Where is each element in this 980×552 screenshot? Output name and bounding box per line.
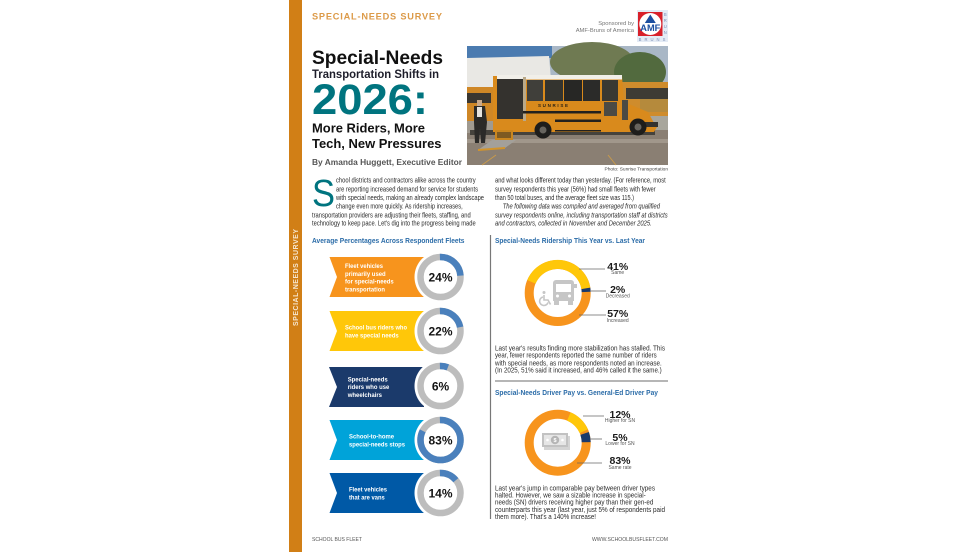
lift <box>495 130 513 140</box>
panel: stat vans: that are vans <box>349 494 385 502</box>
background buses <box>467 87 495 121</box>
icon: AMF-Bruns logo: U <box>650 37 654 42</box>
donut labels: ridership: Same <box>611 270 624 276</box>
donut labels: ridership <box>579 261 630 324</box>
icon: banknotes: $ <box>553 438 557 444</box>
photo: school bus with wheelchair lift: SUNRISE <box>538 103 568 108</box>
text: ridership commentary: (In 2025, 51% said it increased, and 46% called it the same.) <box>495 366 662 374</box>
panel: stat vans: 14% <box>428 486 453 500</box>
trees <box>550 42 634 82</box>
drop cap: S <box>312 173 335 215</box>
photo: school bus with wheelchair lift <box>467 42 668 165</box>
intro text: left column <box>312 175 484 228</box>
panel: stat vans <box>330 467 466 519</box>
icon: AMF-Bruns logo: U <box>664 24 667 29</box>
stripes and name <box>523 111 601 114</box>
intro text: left column: technology to keep pace. Let's dig into the progress being made <box>312 219 476 228</box>
sky <box>467 46 668 106</box>
sponsor credit: AMF-Bruns of America <box>576 28 635 34</box>
heading: driver pay: Special-Needs Driver Pay vs. General-Ed Driver Pay <box>495 388 659 397</box>
title: Transportation Shifts in <box>312 69 439 81</box>
panel: stat fleet vehicles for special needs: primarily used <box>345 271 386 278</box>
sponsor credit <box>576 21 635 34</box>
text: ridership commentary: with special needs, as more respondents noted an increase. <box>494 358 662 368</box>
text: driver pay commentary <box>495 483 665 521</box>
panel: stat school-to-home stops: special-needs stops <box>349 441 405 448</box>
bus body <box>493 76 657 132</box>
icon: AMF-Bruns logo <box>637 10 668 42</box>
text: driver pay commentary: Last year's jump in comparable pay between driver types <box>495 483 655 492</box>
text: driver pay commentary: halted. However, we saw a sizable increase in special- <box>495 490 646 499</box>
donut chart: ridership <box>520 256 595 330</box>
panel: stat school-to-home stops: School-to-home <box>349 434 394 440</box>
donut labels: driver pay <box>577 409 636 471</box>
person <box>477 100 482 106</box>
panel: stat wheelchair riders: 6% <box>432 380 450 394</box>
divider rule <box>495 380 668 382</box>
panel: stat school-to-home stops <box>330 414 466 466</box>
intro text: right column: The following data was compiled and averaged from qualified <box>503 201 661 210</box>
panel: stat wheelchair riders: riders who use <box>348 384 390 391</box>
title: Tech, New Pressures <box>312 136 442 151</box>
icon: AMF-Bruns logo: B <box>664 12 667 17</box>
panel: stat school bus riders: have special needs <box>345 332 399 340</box>
donut labels: driver pay: Lower for SN <box>605 441 635 447</box>
donut labels: driver pay: 12% <box>609 409 631 421</box>
donut labels: driver pay: 5% <box>612 432 628 444</box>
footer <box>312 537 668 543</box>
intro text: right column <box>495 175 668 228</box>
column divider <box>490 235 492 519</box>
intro text: right column: and what looks different today than yesterday. (For reference, most <box>495 175 666 184</box>
donut labels: ridership: Decreased <box>606 294 630 300</box>
icon: AMF-Bruns logo: R <box>664 18 667 23</box>
panel: stat fleet vehicles for special needs: for special-needs <box>345 279 394 286</box>
donut labels: ridership: 57% <box>607 308 629 320</box>
donut labels: driver pay: Higher for SN <box>605 418 636 424</box>
panel: stat vans: Fleet vehicles <box>349 487 387 494</box>
heading: average percentages: Average Percentages Across Respondent Fleets <box>312 236 464 245</box>
panel: stat wheelchair riders: wheelchairs <box>347 392 382 399</box>
donut labels: ridership: 2% <box>610 284 626 296</box>
panel: stat fleet vehicles for special needs: 24% <box>428 270 453 284</box>
title: Special-Needs <box>312 47 443 69</box>
panel: stat fleet vehicles for special needs: transportation <box>345 286 385 293</box>
footer: WWW.SCHOOLBUSFLEET.COM <box>592 537 668 543</box>
text: ridership commentary: Last year's results finding more stabilization has stalled. This <box>495 343 665 352</box>
panel: stat fleet vehicles for special needs: Fleet vehicles <box>345 263 383 270</box>
text: driver pay commentary: needs (SN) drivers receiving higher pay than their gen-ed <box>495 498 653 506</box>
intro text: right column: than 50 total buses, and the average fleet size was 115.) <box>495 193 634 202</box>
donut labels: ridership: Increased <box>607 318 629 324</box>
sponsor credit: Sponsored by <box>598 21 634 27</box>
intro text: right column: survey respondents online, including transportation staff at districts <box>495 210 668 219</box>
icon: AMF-Bruns logo: S <box>663 37 666 42</box>
title: More Riders, More <box>312 120 425 136</box>
intro text: right column: and contractors, collected in November and December 2025. <box>495 219 652 228</box>
intro text: left column: transportation providers are adjusting their fleets, staffing, and <box>312 210 471 219</box>
icon: AMF-Bruns logo: B <box>639 37 642 42</box>
building <box>467 56 552 92</box>
photo credit: Photo: Sunrise Transportation <box>605 166 668 172</box>
title: 2026: <box>312 76 428 124</box>
text: driver pay commentary: counterparts this year (last year, just 5% of respondents paid <box>495 505 665 514</box>
ground <box>467 121 668 165</box>
icon: AMF-Bruns logo: AMF <box>640 23 661 33</box>
panel: stat wheelchair riders <box>329 360 466 412</box>
side bar with vertical label <box>289 0 302 552</box>
parking lines <box>482 155 496 165</box>
panel: stat school bus riders: 22% <box>428 324 453 338</box>
side bar with vertical label: SPECIAL-NEEDS SURVEY <box>293 229 300 326</box>
icon: AMF-Bruns logo: R <box>644 37 648 42</box>
footer: SCHOOL BUS FLEET <box>312 537 363 543</box>
donut chart: driver pay <box>520 405 595 480</box>
icon: AMF-Bruns logo: N <box>664 30 667 35</box>
intro text: left column: chool districts and contractors alike across the country <box>336 175 476 184</box>
text: ridership commentary <box>494 343 665 374</box>
windows <box>527 80 543 101</box>
panel: stat wheelchair riders: Special-needs <box>348 376 388 383</box>
intro text: left column: are reporting increased demand for service for students <box>336 184 478 193</box>
heading: ridership: Special-Needs Ridership This Year vs. Last Year <box>495 236 645 245</box>
donut labels: driver pay: Same rate <box>608 465 632 471</box>
text: driver pay commentary: them more). That's a 140% increase! <box>495 512 596 521</box>
icon: bus front <box>553 280 577 305</box>
text: ridership commentary: year, fewer respondents reported the same number of riders <box>495 350 657 360</box>
panel: stat school bus riders <box>330 305 466 357</box>
icon: AMF-Bruns logo: N <box>656 37 660 42</box>
icon: wheelchair <box>540 291 550 306</box>
donut labels: driver pay: 83% <box>609 455 631 467</box>
panel: stat school-to-home stops: 83% <box>428 434 453 448</box>
panel: stat school bus riders: School bus riders who <box>345 325 407 332</box>
donut labels: ridership: 41% <box>607 261 629 273</box>
title <box>312 47 443 151</box>
intro text: left column: change even more quickly. As ridership increases, <box>336 201 463 210</box>
section tag: SPECIAL-NEEDS SURVEY <box>312 12 442 22</box>
rear door opening <box>497 79 524 119</box>
intro text: right column: survey respondents this year (56%) had small fleets with fewer <box>495 184 656 193</box>
wheels <box>534 122 552 138</box>
intro text: left column: with special needs, making an already complex landscape <box>335 193 484 202</box>
panel: stat fleet vehicles for special needs <box>330 251 466 303</box>
byline: By Amanda Huggett, Executive Editor <box>312 157 463 167</box>
